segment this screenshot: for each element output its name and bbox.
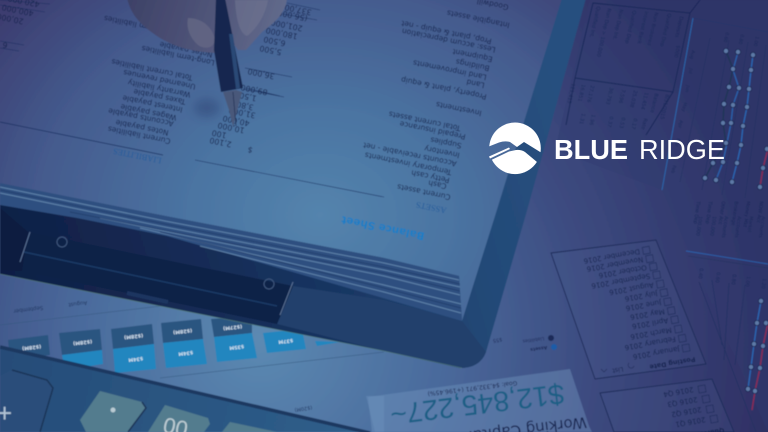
- right sheet: table and line chart: 0.37: [606, 116, 614, 128]
- checklist: posting date: Posting Date: [648, 355, 696, 371]
- liabilities amounts: 201,000: [270, 18, 303, 33]
- binder clip: [22, 232, 293, 324]
- checklist: quarter: [600, 379, 734, 432]
- liabilities column: Notes payable: [158, 40, 213, 59]
- chart axis labels: Jun: [683, 84, 691, 93]
- checklist: quarter: 2016 Q1: [675, 415, 706, 429]
- liabilities column: Total current liabilities: [111, 57, 194, 83]
- liabilities column: Interest payable: [121, 93, 183, 114]
- liabilities column: [103, 14, 215, 166]
- assets column: Intangible assets: [446, 8, 510, 30]
- assets column: Investments: [435, 100, 482, 118]
- assets column: Cash: [427, 178, 447, 191]
- assets column: Less: accum depreciation: [401, 26, 496, 54]
- right sheet: table and line chart: Qualified Dep: [623, 10, 637, 44]
- bar chart: monthly values: ($27M): [223, 323, 242, 331]
- assets column: Property, plant & equip: [400, 75, 487, 101]
- right sheet: table and line chart: 0.40: [697, 268, 704, 279]
- liabilities amounts: 5,500: [259, 44, 282, 57]
- right sheet: table and line chart: 25,038: [628, 90, 638, 108]
- right sheet: table and line chart: 100,000: [694, 216, 703, 236]
- key: partial: [222, 422, 277, 432]
- liabilities column: Taxes payable: [132, 87, 187, 107]
- liabilities amounts: [0, 0, 312, 155]
- assets column: [340, 0, 510, 242]
- key: decimal point: [80, 391, 146, 432]
- checklist: posting date: August 2016: [608, 281, 655, 297]
- right sheet: table and line chart: Non Brokered: [645, 12, 659, 46]
- chart axis labels: 1.00: [752, 36, 760, 47]
- chart axis labels: Feb: [669, 165, 677, 174]
- liabilities column: Accounts payable: [107, 106, 174, 128]
- liabilities column: LIABILITIES: [112, 146, 162, 166]
- chart legend: NOW Acc: [755, 201, 764, 224]
- bar chart: monthly values: September: [12, 304, 43, 314]
- assets column: ASSETS: [415, 200, 447, 216]
- calculator: [0, 346, 370, 432]
- assets column: Prop, plant & equip - net: [400, 19, 492, 46]
- liabilities amounts: 36,000: [247, 67, 275, 81]
- assets column: Total current assets: [388, 109, 462, 133]
- chart axis labels: 0.60: [722, 32, 730, 43]
- checklist: posting date: June 2016: [625, 298, 663, 313]
- liabilities column: Wages payable: [119, 102, 177, 122]
- chart axis labels: Mar: [673, 138, 681, 147]
- assets column: Petty cash: [410, 168, 450, 185]
- chart legend: assets and liabilities: $55: [492, 336, 503, 343]
- bar chart: monthly values: $34M: [178, 349, 193, 357]
- assets column: Equipment: [452, 47, 493, 64]
- right sheet: table and line chart: 1.00: [744, 276, 751, 287]
- right sheet: table and line chart: $000: [672, 45, 681, 58]
- liabilities amounts: (56,000): [274, 7, 308, 23]
- chart legend: assets and liabilities: [492, 335, 557, 352]
- right sheet: table and line chart: 11,454: [639, 92, 649, 110]
- right sheet: table and line chart: Balance: [649, 93, 659, 113]
- logo icon: mountain in circle: [489, 122, 541, 174]
- liabilities amounts: 10,000: [217, 121, 245, 135]
- balance sheet main page: [0, 0, 562, 321]
- right sheet: table and line chart: [555, 0, 768, 432]
- line chart frame: [662, 18, 768, 190]
- liabilities column: Long-term liabilities: [141, 44, 215, 67]
- liabilities amounts: 31,000: [228, 106, 256, 120]
- liabilities amounts: 100: [211, 128, 227, 140]
- logo wordmark: BLUE: [554, 134, 628, 165]
- checklist: posting date: December 2016: [582, 247, 641, 266]
- logo: Blue Ridge: [489, 122, 724, 174]
- liabilities amounts: 6,500: [263, 35, 286, 48]
- liabilities amounts: 89,000: [240, 83, 268, 97]
- bar chart: monthly values: [0, 292, 384, 432]
- checklist: posting date: February 2016: [624, 335, 677, 352]
- assets column: Buildings: [455, 57, 490, 73]
- bar chart: monthly values: August: [68, 299, 87, 307]
- right sheet: table and line chart: 16,851: [576, 84, 586, 102]
- pen shadow: [194, 99, 220, 117]
- liabilities amounts: 6: [2, 40, 8, 50]
- right sheet: table and line chart: 0.17: [630, 118, 638, 130]
- liabilities column: Current liabilities: [107, 124, 171, 146]
- checklist: posting date: April 2016: [631, 316, 669, 331]
- right sheet: table and line chart: Accounts: [757, 216, 766, 239]
- chart markers: [702, 48, 768, 394]
- right sheet: table and line chart: Qualified Dep: [658, 13, 672, 47]
- liabilities amounts: $: [247, 145, 253, 155]
- checklist: posting date: July 2016: [624, 289, 659, 304]
- data table: [566, 0, 700, 135]
- right sheet: table and line chart: 1.20: [760, 278, 767, 289]
- right sheet: table and line chart: 30,793: [604, 87, 614, 105]
- right sheet: table and line chart: 1.96: [588, 114, 596, 126]
- liabilities amounts: 3,800: [231, 99, 254, 112]
- right sheet: table and line chart: 7,596: [617, 89, 626, 104]
- working capital card: $12,845,227~: [388, 377, 566, 430]
- assets column: Temporary investments: [364, 150, 453, 177]
- bar chart: monthly values: ($28M): [124, 332, 143, 340]
- chart axis labels: Apr: [676, 120, 684, 129]
- checklist: posting date: May 2016: [629, 307, 666, 322]
- chart series: [705, 51, 768, 410]
- pen: [214, 0, 243, 127]
- right sheet: table and line chart: 0.53: [618, 117, 626, 129]
- bar chart: monthly values: $35M: [229, 343, 244, 351]
- right sheet: table and line chart: 0.60: [714, 272, 721, 283]
- right sheet: table and line chart: Non Dep Int.: [611, 9, 624, 41]
- assets column: Balance Sheet: [340, 213, 426, 242]
- liabilities column: Notes payable: [114, 118, 169, 137]
- right sheet: table and line chart: 0.80: [730, 274, 737, 285]
- bar chart: monthly values: $37M: [278, 337, 293, 345]
- liabilities amounts: 400,000: [1, 3, 34, 18]
- chart legend: Money Mkt: [741, 201, 751, 228]
- right sheet: table and line chart: 121,415: [565, 83, 576, 104]
- checklist: posting date: [551, 240, 706, 379]
- checklist: posting date: September 2016: [590, 272, 651, 291]
- assets column: Supplies: [429, 135, 462, 150]
- liabilities amounts: 40,000: [222, 114, 250, 128]
- bar chart: monthly values: ($20M): [294, 404, 313, 412]
- liabilities amounts: 2,100: [209, 136, 232, 149]
- liabilities column: Unearned revenues: [122, 68, 196, 91]
- assets column: Inventory: [423, 144, 460, 160]
- chart legend: [692, 200, 764, 228]
- chart legend: assets and liabilities: Liabilities: [522, 335, 545, 344]
- right sheet: table and line chart: Qualified Int.: [588, 6, 601, 39]
- bar chart: monthly values: ($28M): [22, 343, 41, 351]
- bar chart: monthly values: ($28M): [173, 327, 192, 335]
- checklist: posting date: List: [611, 365, 624, 375]
- chart legend: Time Dep: [692, 200, 701, 224]
- liabilities amounts: 1,500: [234, 90, 257, 103]
- hand holding pen: [127, 0, 287, 53]
- right sheet: table and line chart: Interest Bank: [636, 11, 649, 45]
- logo wordmark: RIDGE: [639, 134, 725, 165]
- right sheet: table and line chart: 27,176: [585, 85, 595, 103]
- checklist: posting date: October 2016: [598, 263, 648, 280]
- assets column: Prepaid insurance: [398, 119, 466, 141]
- chart axis labels: Jul: [687, 67, 694, 74]
- liabilities amounts: 337,000: [279, 2, 312, 17]
- assets column: Land: [465, 77, 485, 90]
- checklist: posting date: November 2016: [586, 255, 644, 274]
- assets column: Accounts receivable - net: [362, 141, 457, 168]
- liabilities column: Total long-term liabilities: [103, 14, 196, 41]
- right sheet: table and line chart: Deposits: [673, 16, 684, 38]
- balance sheet page stack: [0, 183, 462, 321]
- checklist: quarter: 2016 Q3: [667, 395, 698, 409]
- chart axis labels: [669, 32, 760, 174]
- chart axis labels: May: [680, 102, 688, 112]
- chart axis labels: 0.80: [737, 34, 745, 45]
- chart legend: Other Acc: [717, 201, 726, 225]
- chart legend: Time Dep: [704, 200, 713, 224]
- right sheet: table and line chart: Rate: [639, 118, 648, 130]
- right sheet: table and line chart: 1.31: [578, 113, 586, 125]
- checklist: quarter: 2016 Q4: [662, 385, 694, 399]
- folder with binder clip: [0, 0, 586, 368]
- key: plus: [0, 370, 53, 432]
- working capital card: [368, 369, 592, 432]
- assets column: Land improvements: [412, 58, 487, 82]
- checklist: quarter: 2016 Q2: [671, 405, 702, 419]
- right sheet: table and line chart: Non Dep > 100,000: [595, 8, 612, 57]
- liabilities amounts: 180,000: [265, 26, 298, 41]
- chart legend: Brokerage: [730, 201, 739, 226]
- liabilities column: Warranty liability: [127, 78, 191, 99]
- right sheet: table and line chart: Accounts: [733, 216, 742, 239]
- bar chart: monthly values: ($28M): [73, 338, 92, 346]
- right sheet: table and line chart: 8/31/2015: [658, 94, 670, 120]
- checklist: posting date: March 2016: [629, 326, 673, 342]
- chart axis labels: Aug: [688, 50, 696, 60]
- key: double zero: [148, 405, 210, 432]
- chart legend: assets and liabilities: Assets: [530, 344, 548, 352]
- right sheet: table and line chart: Market: [746, 216, 754, 233]
- right sheet: table and line chart: 100,000: [708, 216, 717, 236]
- right sheet: table and line chart: Accounts: [720, 216, 729, 239]
- checklist: posting date: January 2016: [632, 344, 681, 362]
- working capital card: Goal: $4,332,971 (+196.45%): [427, 379, 518, 397]
- bar chart: monthly values: $34M: [128, 355, 143, 363]
- assets column: Current assets: [396, 182, 451, 202]
